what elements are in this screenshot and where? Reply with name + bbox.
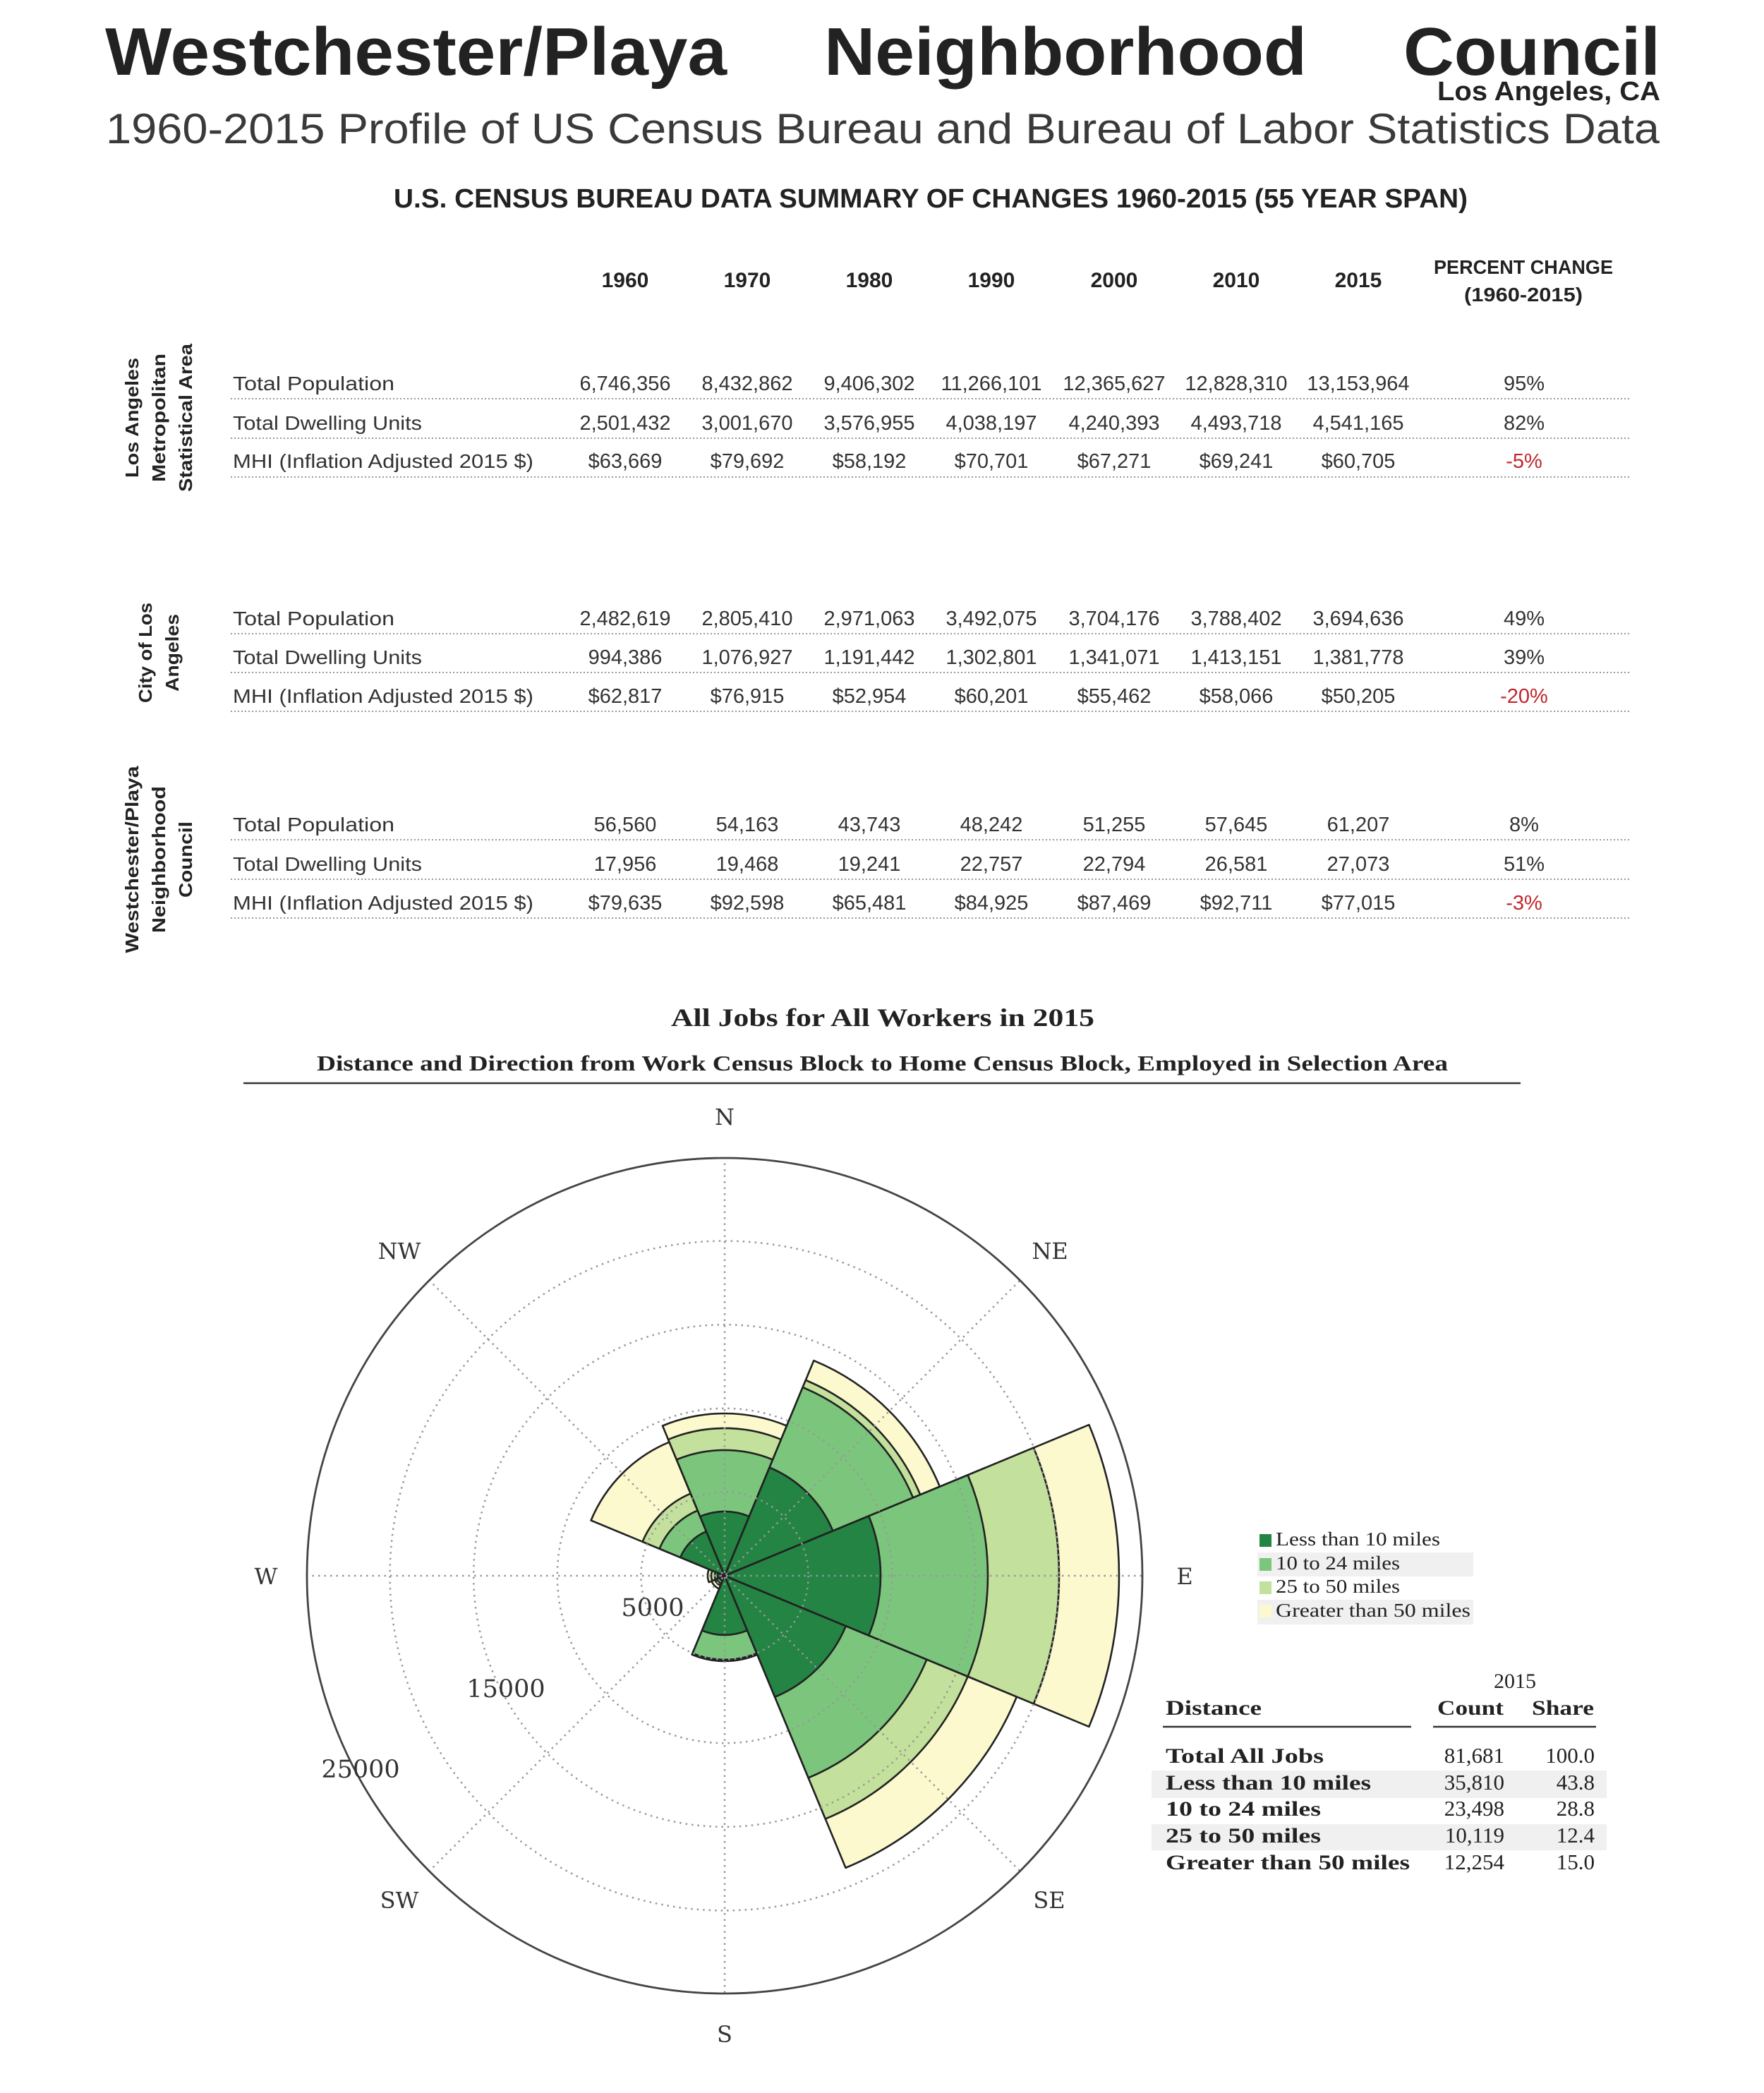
location label: Los Angeles, CA bbox=[1437, 77, 1660, 107]
row: council dwelling units: 22,757 bbox=[960, 853, 1022, 876]
table row: total: 81,681 bbox=[1444, 1743, 1504, 1768]
row: city total population: Total Population bbox=[233, 608, 394, 629]
table row: less than 10 miles bbox=[1166, 1770, 1595, 1795]
row: metro total population: 13,153,964 bbox=[1307, 373, 1410, 395]
row: council median household income bbox=[231, 892, 1630, 918]
radial value labels: 25000 bbox=[321, 1756, 400, 1784]
table header bbox=[1163, 1670, 1596, 1727]
row: metro dwelling units: 3,576,955 bbox=[823, 412, 915, 435]
row: council total population: Total Population bbox=[233, 814, 394, 836]
distance table bbox=[1152, 1670, 1607, 1874]
row: city dwelling units: 1,076,927 bbox=[701, 646, 793, 669]
row: city median household income: $62,817 bbox=[588, 685, 662, 708]
table header: Count bbox=[1437, 1696, 1504, 1720]
row: metro median household income: $58,192 bbox=[833, 450, 906, 473]
row: metro total population: 12,828,310 bbox=[1185, 373, 1288, 395]
row: city median household income: -20% bbox=[1500, 685, 1548, 708]
row: city total population: 2,805,410 bbox=[701, 608, 793, 630]
row: council total population: 43,743 bbox=[838, 814, 900, 836]
chart subtitle: Distance and Direction from Work Census Block to Home Census Block, Employed in Selection Area bbox=[317, 1051, 1449, 1075]
row: city total population: 2,971,063 bbox=[823, 608, 915, 630]
table header: (1960-2015) bbox=[1464, 284, 1583, 306]
row: metro dwelling units: 3,001,670 bbox=[701, 412, 793, 435]
row: city dwelling units: 1,341,071 bbox=[1068, 646, 1160, 669]
row: city total population: 2,482,619 bbox=[579, 608, 671, 630]
table row: total bbox=[1166, 1743, 1595, 1768]
row: city dwelling units: 1,413,151 bbox=[1190, 646, 1282, 669]
row: council total population bbox=[231, 814, 1630, 840]
table row: 10 to 24 miles: 23,498 bbox=[1444, 1796, 1504, 1821]
side label: city: City of Los bbox=[135, 603, 156, 703]
row: metro median household income: $70,701 bbox=[955, 450, 1028, 473]
row: council dwelling units bbox=[231, 853, 1630, 879]
row: metro median household income: $63,669 bbox=[588, 450, 662, 473]
row: council median household income: $87,469 bbox=[1077, 892, 1151, 915]
side label: council bbox=[121, 766, 196, 953]
table header: 1990 bbox=[968, 269, 1015, 292]
direction labels: W bbox=[255, 1563, 278, 1590]
direction labels: N bbox=[715, 1104, 735, 1130]
row: city dwelling units bbox=[231, 646, 1630, 672]
table row: 10 to 24 miles bbox=[1166, 1796, 1595, 1821]
row: council median household income: -3% bbox=[1506, 892, 1542, 915]
table header: PERCENT CHANGE bbox=[1434, 256, 1613, 278]
row: council dwelling units: 22,794 bbox=[1083, 853, 1145, 876]
wedge: northwest bbox=[584, 1435, 764, 1615]
wedge: south bbox=[692, 1576, 757, 1661]
side label: metro: Metropolitan bbox=[148, 354, 169, 482]
radial chart: distance and direction bbox=[255, 1104, 1193, 2048]
table header: 2000 bbox=[1091, 269, 1137, 292]
row: metro dwelling units: 2,501,432 bbox=[579, 412, 671, 435]
row: metro total population bbox=[231, 373, 1630, 399]
table row: total: 100.0 bbox=[1545, 1743, 1595, 1768]
row: metro dwelling units: Total Dwelling Units bbox=[233, 412, 422, 434]
section heading: U.S. CENSUS BUREAU DATA SUMMARY OF CHANGES 1960-2015 (55 YEAR SPAN) bbox=[394, 184, 1468, 214]
table row: 25 to 50 miles: 25 to 50 miles bbox=[1166, 1824, 1321, 1847]
row: metro median household income: $60,705 bbox=[1322, 450, 1395, 473]
row: city total population: 3,788,402 bbox=[1190, 608, 1282, 630]
table header: 1960 bbox=[602, 269, 648, 292]
row: city median household income: $60,201 bbox=[955, 685, 1028, 708]
row: council dwelling units: 26,581 bbox=[1205, 853, 1267, 876]
row: metro median household income: $69,241 bbox=[1200, 450, 1273, 473]
row: council dwelling units: 51% bbox=[1504, 853, 1545, 876]
table row: 10 to 24 miles: 10 to 24 miles bbox=[1166, 1797, 1321, 1821]
row: metro total population: 11,266,101 bbox=[941, 373, 1041, 395]
side label: metro bbox=[121, 343, 196, 492]
direction labels: S bbox=[717, 2021, 732, 2048]
row: city total population: 3,694,636 bbox=[1312, 608, 1404, 630]
row: metro dwelling units: 4,240,393 bbox=[1068, 412, 1160, 435]
direction labels: NW bbox=[378, 1238, 421, 1265]
table row: 25 to 50 miles: 10,119 bbox=[1445, 1823, 1504, 1847]
row: city total population: 3,704,176 bbox=[1068, 608, 1160, 630]
row: council total population: 8% bbox=[1509, 814, 1539, 836]
table row: greater than 50 miles bbox=[1166, 1850, 1595, 1874]
row: city total population: 3,492,075 bbox=[946, 608, 1037, 630]
side label: council: Neighborhood bbox=[148, 786, 169, 933]
legend bbox=[1257, 1528, 1473, 1624]
title: Council bbox=[1403, 14, 1660, 90]
side label: council: Westchester/Playa bbox=[121, 766, 143, 953]
table header: 1970 bbox=[724, 269, 771, 292]
row: city median household income: $50,205 bbox=[1322, 685, 1395, 708]
table row: less than 10 miles: Less than 10 miles bbox=[1166, 1771, 1371, 1795]
table row: 10 to 24 miles: 28.8 bbox=[1557, 1796, 1595, 1821]
row: council median household income: $77,015 bbox=[1322, 892, 1395, 915]
table header bbox=[602, 256, 1613, 306]
row: metro median household income bbox=[231, 450, 1630, 477]
row: city dwelling units: 1,381,778 bbox=[1312, 646, 1404, 669]
wedge: southeast bbox=[639, 1490, 1034, 1885]
row: city dwelling units: 994,386 bbox=[588, 646, 662, 669]
table header: 2010 bbox=[1213, 269, 1259, 292]
direction labels: SE bbox=[1033, 1887, 1065, 1914]
row: city total population: 49% bbox=[1504, 608, 1545, 630]
direction labels: E bbox=[1176, 1563, 1193, 1590]
table row: greater than 50 miles: 12,254 bbox=[1444, 1850, 1504, 1874]
table row: less than 10 miles: 43.8 bbox=[1557, 1770, 1595, 1795]
title: Neighborhood bbox=[824, 14, 1307, 90]
row: city dwelling units: 1,191,442 bbox=[823, 646, 915, 669]
table row: greater than 50 miles: 15.0 bbox=[1557, 1850, 1595, 1874]
row: council median household income: $79,635 bbox=[588, 892, 662, 915]
row: metro total population: 6,746,356 bbox=[579, 373, 671, 395]
row: metro dwelling units: 4,541,165 bbox=[1312, 412, 1404, 435]
row: city median household income: $58,066 bbox=[1200, 685, 1273, 708]
row: metro total population: 9,406,302 bbox=[823, 373, 915, 395]
wedge: east bbox=[725, 1425, 1119, 1727]
row: council dwelling units: 19,468 bbox=[716, 853, 778, 876]
row: council dwelling units: 17,956 bbox=[594, 853, 656, 876]
row: council median household income: $92,711 bbox=[1200, 892, 1272, 915]
row: metro median household income: -5% bbox=[1506, 450, 1542, 473]
wedge: southwest bbox=[711, 1572, 728, 1590]
row: council median household income: $84,925 bbox=[955, 892, 1028, 915]
row: metro median household income: $79,692 bbox=[711, 450, 784, 473]
direction labels: SW bbox=[380, 1887, 419, 1914]
table header: Share bbox=[1532, 1696, 1594, 1720]
row: metro median household income: $67,271 bbox=[1077, 450, 1151, 473]
row: metro total population: 8,432,862 bbox=[701, 373, 793, 395]
legend item: greater than 50 miles: Greater than 50 miles bbox=[1276, 1600, 1470, 1621]
table row: 25 to 50 miles bbox=[1166, 1823, 1595, 1847]
table header: 2015 bbox=[1335, 269, 1382, 292]
table row: 25 to 50 miles: 12.4 bbox=[1557, 1823, 1595, 1847]
row: council median household income: MHI (Inflation Adjusted 2015 $) bbox=[233, 892, 533, 914]
legend item: less than 10 miles: Less than 10 miles bbox=[1276, 1528, 1440, 1550]
row: council dwelling units: Total Dwelling Units bbox=[233, 853, 422, 875]
direction labels: NE bbox=[1032, 1238, 1068, 1265]
table header: Distance bbox=[1166, 1696, 1262, 1720]
subtitle: 1960-2015 Profile of US Census Bureau and Bureau of Labor Statistics Data bbox=[106, 105, 1660, 152]
panel: City of Los Angeles bbox=[135, 603, 1630, 711]
row: council median household income: $65,481 bbox=[833, 892, 906, 915]
row: metro total population: 12,365,627 bbox=[1063, 373, 1166, 395]
row: metro dwelling units: 82% bbox=[1504, 412, 1545, 435]
row: city dwelling units: 39% bbox=[1504, 646, 1545, 669]
table row: total: Total All Jobs bbox=[1166, 1744, 1324, 1768]
table header: 1980 bbox=[846, 269, 893, 292]
row: council total population: 61,207 bbox=[1327, 814, 1389, 836]
row: city total population bbox=[231, 608, 1630, 634]
row: city median household income: $76,915 bbox=[711, 685, 784, 708]
wedge: northeast bbox=[662, 1348, 953, 1639]
row: city median household income: MHI (Inflation Adjusted 2015 $) bbox=[233, 685, 533, 707]
title bbox=[105, 14, 1660, 90]
wedge: west bbox=[708, 1569, 725, 1582]
row: council dwelling units: 19,241 bbox=[838, 853, 900, 876]
radial value labels: 15000 bbox=[466, 1675, 545, 1703]
row: metro total population: 95% bbox=[1504, 373, 1545, 395]
row: city median household income: $55,462 bbox=[1077, 685, 1151, 708]
wedge: north bbox=[663, 1413, 787, 1576]
row: council total population: 54,163 bbox=[716, 814, 778, 836]
row: council total population: 51,255 bbox=[1083, 814, 1145, 836]
table row: less than 10 miles: 35,810 bbox=[1444, 1770, 1504, 1795]
row: city median household income bbox=[231, 685, 1630, 711]
table header: 2015 bbox=[1494, 1670, 1536, 1693]
outer circle bbox=[307, 1158, 1142, 1994]
row: city dwelling units: Total Dwelling Units bbox=[233, 646, 422, 668]
table row: greater than 50 miles: Greater than 50 miles bbox=[1166, 1851, 1410, 1874]
radial value labels: 5000 bbox=[621, 1594, 684, 1622]
row: metro median household income: MHI (Inflation Adjusted 2015 $) bbox=[233, 450, 533, 472]
row: council total population: 57,645 bbox=[1205, 814, 1267, 836]
radial value labels bbox=[321, 1594, 684, 1784]
row: metro dwelling units: 4,038,197 bbox=[946, 412, 1037, 435]
legend item: 25 to 50 miles: 25 to 50 miles bbox=[1276, 1576, 1400, 1597]
side label: city bbox=[135, 603, 183, 703]
direction labels bbox=[255, 1104, 1193, 2048]
title: Westchester/Playa bbox=[105, 14, 727, 90]
row: metro dwelling units: 4,493,718 bbox=[1190, 412, 1282, 435]
row: council dwelling units: 27,073 bbox=[1327, 853, 1389, 876]
panel: Westchester/Playa Neighborhood Council bbox=[121, 766, 1630, 953]
side label: city: Angeles bbox=[162, 614, 183, 692]
row: council total population: 48,242 bbox=[960, 814, 1022, 836]
row: city median household income: $52,954 bbox=[833, 685, 906, 708]
row: council total population: 56,560 bbox=[594, 814, 656, 836]
side label: metro: Los Angeles bbox=[121, 358, 143, 478]
chart title: All Jobs for All Workers in 2015 bbox=[671, 1003, 1094, 1032]
row: city dwelling units: 1,302,801 bbox=[946, 646, 1037, 669]
legend item: 10 to 24 miles: 10 to 24 miles bbox=[1276, 1552, 1400, 1574]
row: metro dwelling units bbox=[231, 412, 1630, 438]
row: council median household income: $92,598 bbox=[711, 892, 784, 915]
side label: council: Council bbox=[175, 821, 196, 898]
panel: Los Angeles Metropolitan Statistical Area bbox=[121, 343, 1630, 492]
side label: metro: Statistical Area bbox=[175, 343, 196, 492]
row: metro total population: Total Population bbox=[233, 373, 394, 394]
